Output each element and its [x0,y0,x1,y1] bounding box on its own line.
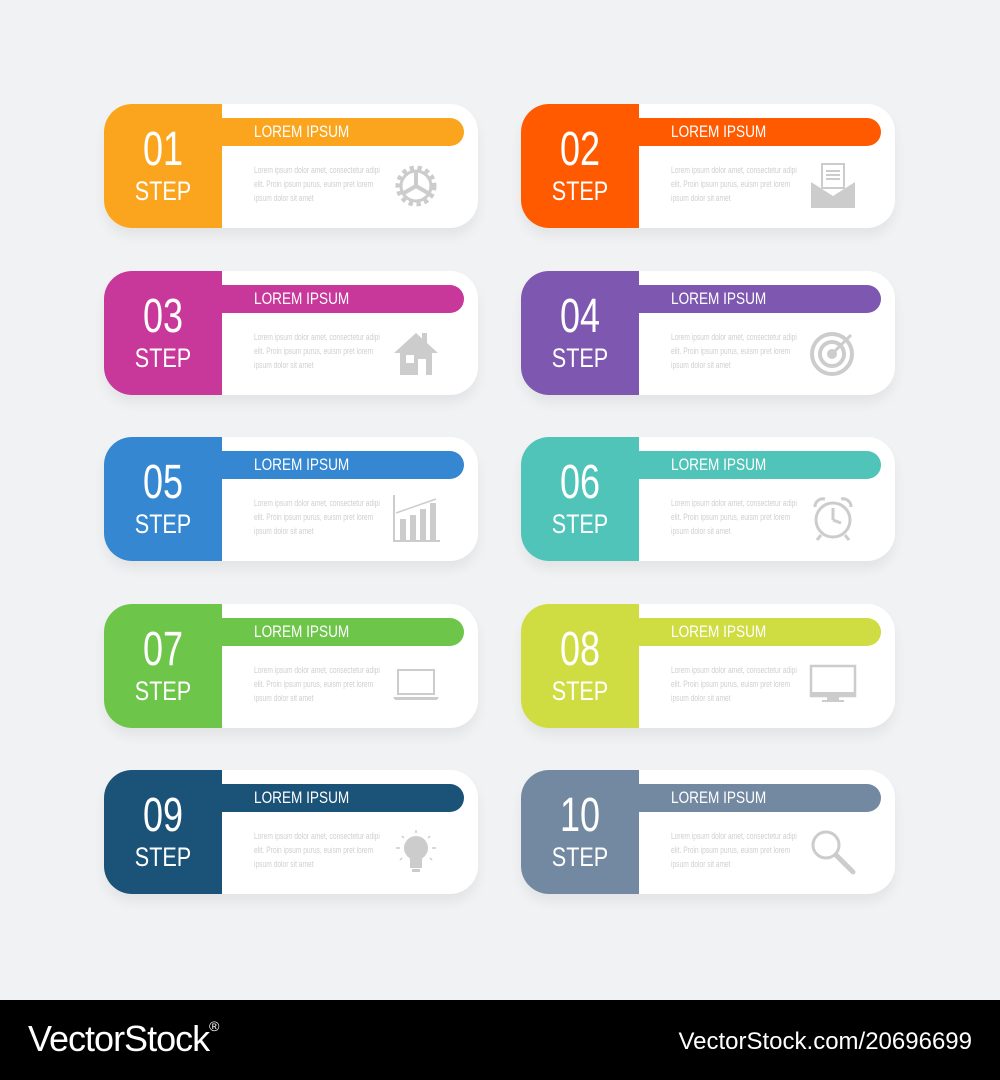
card: step 01: elit. Proin ipsum purus, euism pret lorem [254,179,373,189]
card: step 07: ipsum dolor sit amet [254,693,314,703]
icon: light bulb [396,830,436,872]
card: step 04: LOREM IPSUM [671,289,766,308]
card: step 05: elit. Proin ipsum purus, euism pret lorem [254,512,373,522]
card: step 02: elit. Proin ipsum purus, euism pret lorem [671,179,790,189]
card: step 04: elit. Proin ipsum purus, euism pret lorem [671,346,790,356]
card: step 05: Lorem ipsum dolor amet, consectetur adipi [254,498,380,508]
card: step 09: STEP [135,842,191,872]
card: step 07: Lorem ipsum dolor amet, consectetur adipi [254,665,380,675]
card: step 04: STEP [552,343,608,373]
card: step 03: 03 [143,290,183,343]
card: step 06: Lorem ipsum dolor amet, consectetur adipi [671,498,797,508]
card: step 06 [521,437,895,561]
card: step 07: STEP [135,676,191,706]
footer watermark bar: VectorStock® [28,1018,218,1059]
icon: magnifier [812,830,856,874]
card: step 09: LOREM IPSUM [254,788,349,807]
card: step 08: 08 [560,623,600,676]
card: step 02: 02 [560,123,600,176]
icon: laptop [393,669,439,700]
card: step 02: Lorem ipsum dolor amet, consectetur adipi [671,165,797,175]
footer watermark bar [0,1000,1000,1080]
card: step 03: LOREM IPSUM [254,289,349,308]
icon: bar chart [393,495,440,542]
card: step 07 [104,604,478,728]
card: step 05: STEP [135,509,191,539]
card: step 03: elit. Proin ipsum purus, euism pret lorem [254,346,373,356]
card: step 09: Lorem ipsum dolor amet, consectetur adipi [254,831,380,841]
card: step 04: Lorem ipsum dolor amet, consectetur adipi [671,332,797,342]
card: step 07: elit. Proin ipsum purus, euism pret lorem [254,679,373,689]
card: step 10: ipsum dolor sit amet [671,859,731,869]
icon: alarm clock [814,497,852,541]
card: step 10: STEP [552,842,608,872]
card: step 04: 04 [560,290,600,343]
card: step 01: Lorem ipsum dolor amet, consectetur adipi [254,165,380,175]
card: step 09 [104,770,478,894]
card: step 08: LOREM IPSUM [671,622,766,641]
card: step 03: Lorem ipsum dolor amet, consectetur adipi [254,332,380,342]
card: step 02 [521,104,895,228]
card: step 10 [521,770,895,894]
footer watermark bar: VectorStock.com/20696699 [678,1028,972,1055]
card: step 10: 10 [560,789,600,842]
card: step 06: STEP [552,509,608,539]
card: step 10: LOREM IPSUM [671,788,766,807]
card: step 06: elit. Proin ipsum purus, euism pret lorem [671,512,790,522]
card: step 10: elit. Proin ipsum purus, euism pret lorem [671,845,790,855]
card: step 04 [521,271,895,395]
card: step 08 [521,604,895,728]
card: step 03: STEP [135,343,191,373]
card: step 10: Lorem ipsum dolor amet, consectetur adipi [671,831,797,841]
card: step 05: ipsum dolor sit amet [254,526,314,536]
card: step 07: LOREM IPSUM [254,622,349,641]
card: step 08: elit. Proin ipsum purus, euism pret lorem [671,679,790,689]
card: step 04: ipsum dolor sit amet [671,360,731,370]
card: step 02: ipsum dolor sit amet [671,193,731,203]
card: step 06: 06 [560,456,600,509]
card: step 01: 01 [143,123,183,176]
card: step 08: Lorem ipsum dolor amet, consectetur adipi [671,665,797,675]
card: step 05: LOREM IPSUM [254,455,349,474]
card: step 09: elit. Proin ipsum purus, euism pret lorem [254,845,373,855]
icon: envelope [811,163,855,208]
card: step 06: ipsum dolor sit amet [671,526,731,536]
card: step 06: LOREM IPSUM [671,455,766,474]
card: step 03 [104,271,478,395]
card: step 02: STEP [552,176,608,206]
card: step 05: 05 [143,456,183,509]
card: step 09: ipsum dolor sit amet [254,859,314,869]
card: step 08: ipsum dolor sit amet [671,693,731,703]
card: step 09: 09 [143,789,183,842]
icon: house [394,333,438,375]
icon: target [810,332,854,376]
card: step 01: STEP [135,176,191,206]
icon: gear [396,166,436,206]
card: step 01 [104,104,478,228]
card: step 03: ipsum dolor sit amet [254,360,314,370]
card: step 02: LOREM IPSUM [671,122,766,141]
card: step 01: ipsum dolor sit amet [254,193,314,203]
card: step 08: STEP [552,676,608,706]
card: step 07: 07 [143,623,183,676]
card: step 01: LOREM IPSUM [254,122,349,141]
card: step 05 [104,437,478,561]
icon: monitor [810,664,856,702]
